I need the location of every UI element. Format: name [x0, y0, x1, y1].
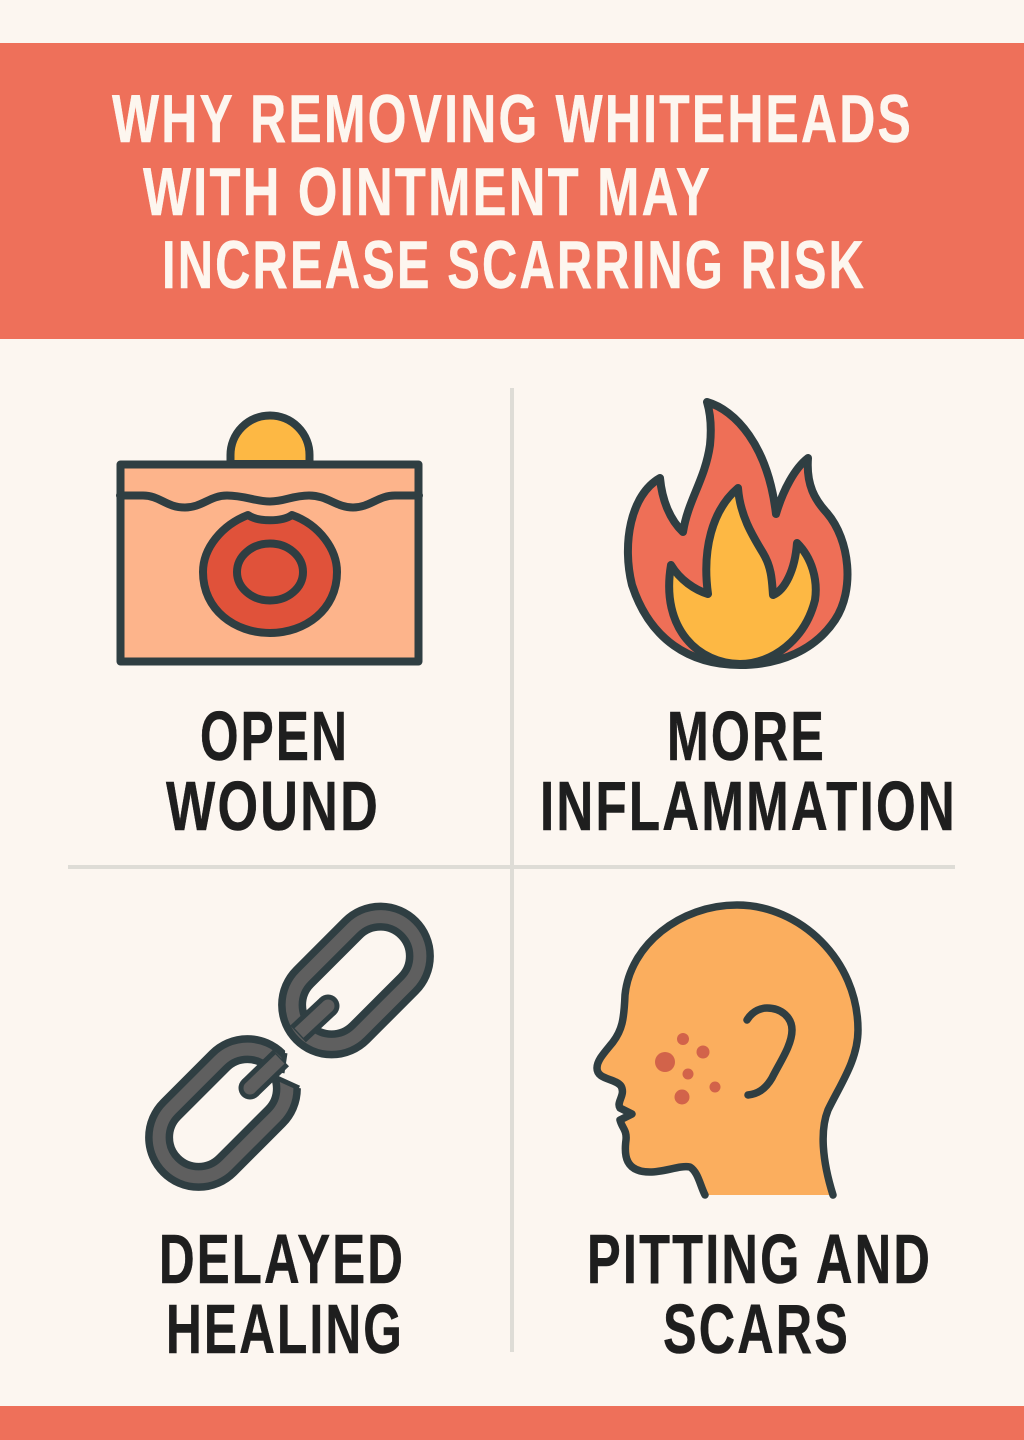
label: open wound: OPEN — [200, 697, 349, 775]
title — [112, 81, 913, 303]
icon: head profile with acne marks — [597, 905, 858, 1195]
header banner — [0, 43, 1024, 339]
icon: skin cross-section with open wound — [120, 416, 419, 662]
lower link — [143, 1033, 335, 1193]
panel: open wound — [120, 416, 419, 845]
label: delayed healing: DELAYED — [159, 1220, 405, 1298]
label: delayed healing — [159, 1220, 405, 1368]
label: delayed healing: HEALING — [166, 1290, 404, 1368]
panel: more inflammation — [540, 402, 957, 845]
label: pitting and scars: SCARS — [663, 1290, 850, 1368]
label: more inflammation — [540, 697, 957, 845]
label: open wound: WOUND — [166, 767, 380, 845]
label: pitting and scars — [587, 1220, 932, 1368]
upper link — [276, 900, 436, 1061]
panel: delayed healing — [143, 900, 436, 1368]
title: WITH OINTMENT MAY — [143, 154, 712, 230]
label: more inflammation: MORE — [667, 697, 826, 775]
label: open wound — [166, 697, 380, 845]
icon: flame — [628, 402, 847, 665]
icon: broken chain — [143, 900, 436, 1193]
panel: pitting and scars — [587, 905, 932, 1368]
footer band — [0, 1406, 1024, 1440]
